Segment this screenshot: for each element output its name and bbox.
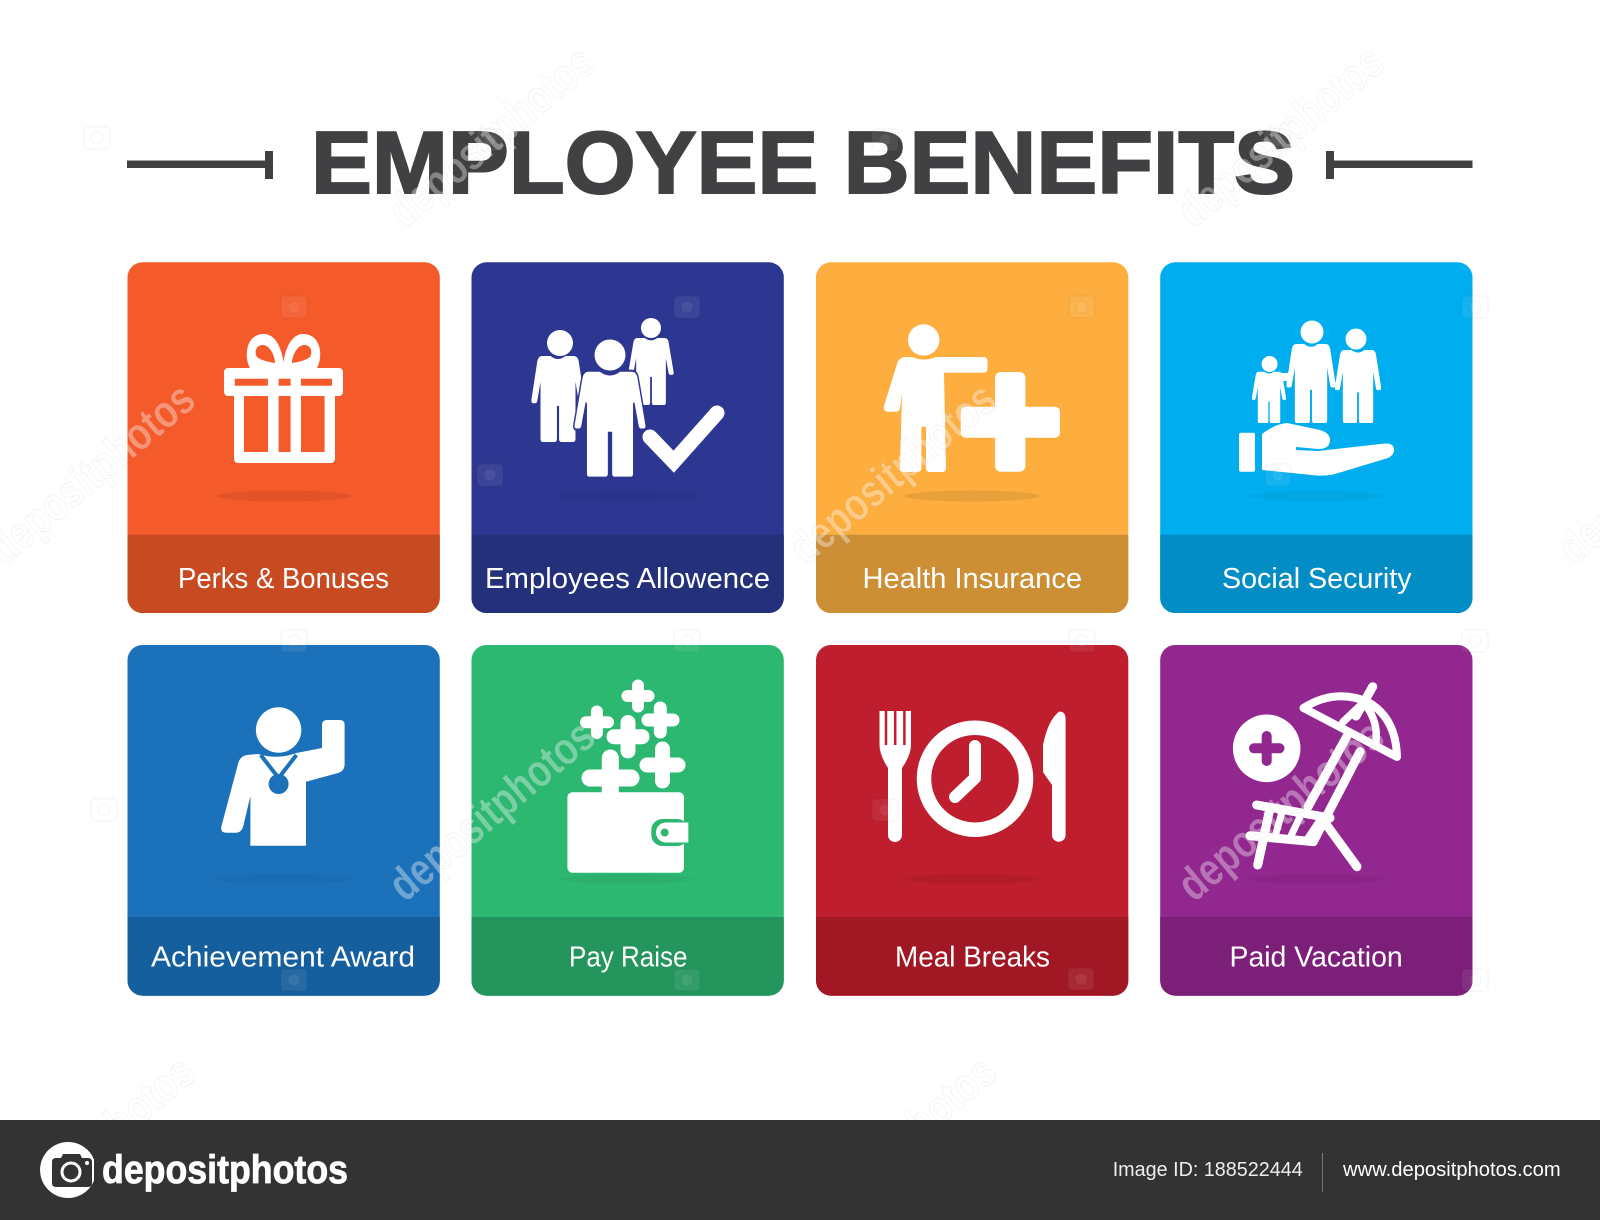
panel: Achievement Award (128, 645, 440, 996)
footer divider (1322, 1153, 1323, 1192)
image id: Image ID: 188522444 (1113, 1159, 1303, 1181)
brand name: depositphotos (102, 1148, 348, 1192)
panel: Paid Vacation (1160, 645, 1472, 996)
watermark camera marks (84, 127, 1488, 991)
icon: fork, clock plate and knife (880, 709, 1066, 842)
icon: family on open hand (1239, 320, 1394, 476)
title: EMPLOYEE BENEFITS (311, 113, 1295, 212)
panel: Employees Allowence (472, 262, 784, 613)
label: Health Insurance (862, 563, 1082, 595)
label: Meal Breaks (895, 942, 1050, 974)
right title rule (1326, 151, 1472, 179)
watermark text: depositphotos (1167, 35, 1393, 237)
watermark text: depositphotos (1167, 709, 1393, 911)
panel: Meal Breaks (816, 645, 1128, 996)
watermark text: depositphotos (378, 35, 604, 237)
icon: people with check mark (531, 318, 717, 478)
panel: Pay Raise (472, 645, 784, 996)
panel: Perks & Bonuses (128, 262, 440, 613)
icon: plus badge and beach chair with umbrella (1233, 687, 1397, 867)
panel: Health Insurance (816, 262, 1128, 613)
label: Achievement Award (151, 942, 415, 974)
label: Paid Vacation (1230, 942, 1403, 974)
icon: wallet with plus signs (567, 686, 688, 873)
icon: person with medical cross (884, 324, 1060, 472)
icon: person with medal (221, 707, 345, 846)
icon: camera logo (40, 1142, 94, 1198)
label: Employees Allowence (485, 563, 770, 595)
footer bar (0, 1120, 1600, 1220)
label: Pay Raise (569, 942, 688, 974)
label: Social Security (1222, 563, 1412, 595)
website: www.depositphotos.com (1342, 1159, 1561, 1181)
watermark text: depositphotos (378, 709, 604, 911)
watermark text: depositphotos (779, 372, 1005, 574)
icon: gift box (224, 334, 343, 463)
left title rule (127, 151, 273, 179)
panel: Social Security (1160, 262, 1472, 613)
label: Perks & Bonuses (178, 563, 389, 595)
